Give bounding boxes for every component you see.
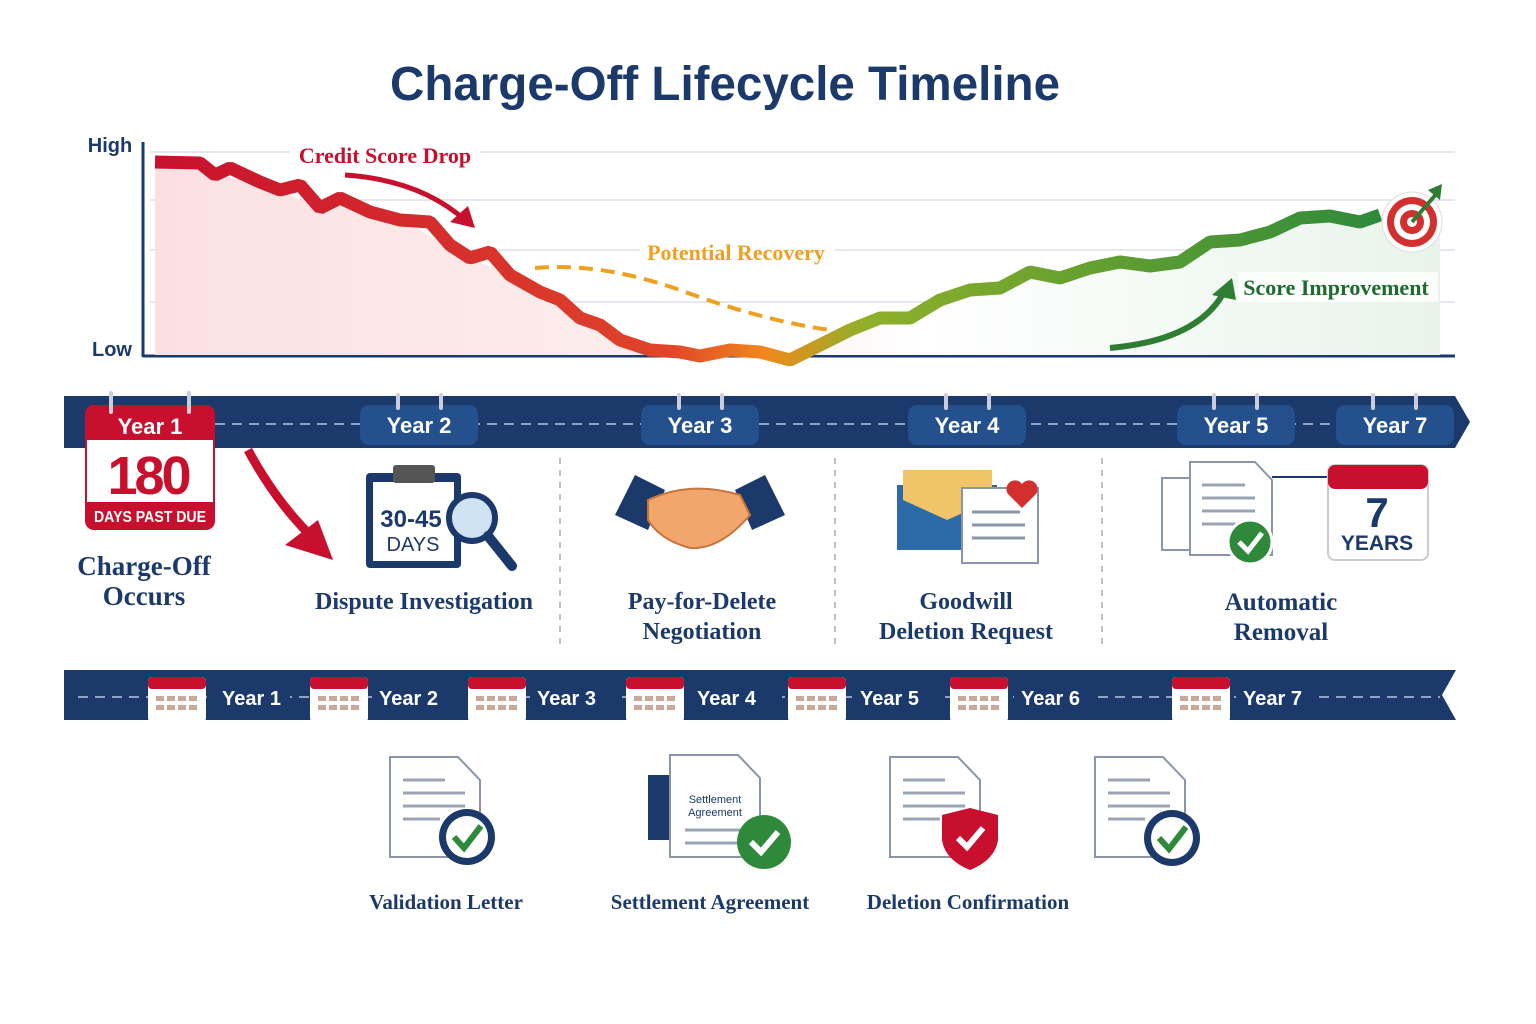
icon: calendar 7 years xyxy=(1328,465,1428,560)
text: dispute investigation: Dispute Investigation xyxy=(315,589,533,615)
bottom timeline band: Year 6 xyxy=(1021,688,1080,710)
score line xyxy=(155,162,1380,360)
icon: documents with check xyxy=(1162,462,1330,564)
text: charge-off occurs: Occurs xyxy=(103,581,185,611)
icon: calendar 7 years: YEARS xyxy=(1341,532,1413,555)
axis labels: High xyxy=(88,135,132,157)
calendar: 180 days past due: 180 xyxy=(107,446,190,506)
bottom timeline band xyxy=(64,670,1456,722)
icon: document with check xyxy=(1095,757,1200,866)
label: credit score drop: Credit Score Drop xyxy=(299,143,471,168)
icon: settlement agreement xyxy=(648,755,791,869)
icon: target xyxy=(1382,184,1442,252)
icon: clipboard 30-45 days xyxy=(366,465,512,568)
bottom timeline band: Year 1 xyxy=(222,688,281,710)
icon: deletion confirmation xyxy=(890,757,998,870)
dividers xyxy=(560,458,1102,645)
title: Charge-Off Lifecycle Timeline xyxy=(390,58,1060,111)
bottom timeline band: Year 4 xyxy=(697,688,757,710)
arrow: red xyxy=(248,450,333,560)
text: goodwill deletion request: Deletion Request xyxy=(879,619,1053,645)
chart: credit score over time xyxy=(88,135,1455,361)
year tabs: Year 5 xyxy=(1204,413,1268,438)
icon: settlement agreement: Settlement xyxy=(689,794,741,806)
bottom timeline band: Year 2 xyxy=(379,688,438,710)
text: charge-off occurs: Charge-Off xyxy=(77,551,212,581)
axis labels xyxy=(88,135,132,361)
icon: settlement agreement: Agreement xyxy=(688,807,742,819)
text: goodwill deletion request: Goodwill xyxy=(919,589,1013,615)
text: pay-for-delete negotiation: Pay-for-Delete xyxy=(628,589,777,615)
label: credit score drop xyxy=(290,138,480,228)
text: validation letter: Validation Letter xyxy=(369,890,523,914)
icon: envelope and letter xyxy=(897,470,1038,563)
icon: handshake xyxy=(615,475,785,548)
year tabs: Year 3 xyxy=(668,413,732,438)
text: settlement agreement: Settlement Agreement xyxy=(611,890,809,914)
year tabs: Year 4 xyxy=(935,413,1000,438)
icon: clipboard 30-45 days: 30-45 xyxy=(380,506,442,533)
bottom timeline band: Year 7 xyxy=(1243,688,1302,710)
bottom timeline band: Year 5 xyxy=(860,688,919,710)
dashed potential recovery: Potential Recovery xyxy=(647,240,825,265)
axis labels: Low xyxy=(92,339,132,361)
year tabs xyxy=(360,405,1454,445)
text: deletion confirmation: Deletion Confirmation xyxy=(867,890,1070,914)
text: automatic removal: Automatic xyxy=(1225,589,1337,616)
label: score improvement: Score Improvement xyxy=(1243,275,1429,300)
calendar: 180 days past due xyxy=(85,393,215,530)
icon: calendar 7 years: 7 xyxy=(1365,489,1389,536)
calendar: 180 days past due: DAYS PAST DUE xyxy=(94,509,206,526)
icon: clipboard 30-45 days: DAYS xyxy=(387,534,439,556)
calendar: 180 days past due: Year 1 xyxy=(118,414,182,439)
text: pay-for-delete negotiation: Negotiation xyxy=(643,619,761,645)
year tabs: Year 7 xyxy=(1363,413,1427,438)
bottom timeline band: Year 3 xyxy=(537,688,596,710)
label: score improvement xyxy=(1110,272,1438,348)
text: automatic removal: Removal xyxy=(1234,619,1328,646)
dashed potential recovery xyxy=(535,236,835,330)
top timeline band xyxy=(64,395,1470,448)
icon: validation letter xyxy=(390,757,495,865)
year tabs: Year 2 xyxy=(387,413,451,438)
